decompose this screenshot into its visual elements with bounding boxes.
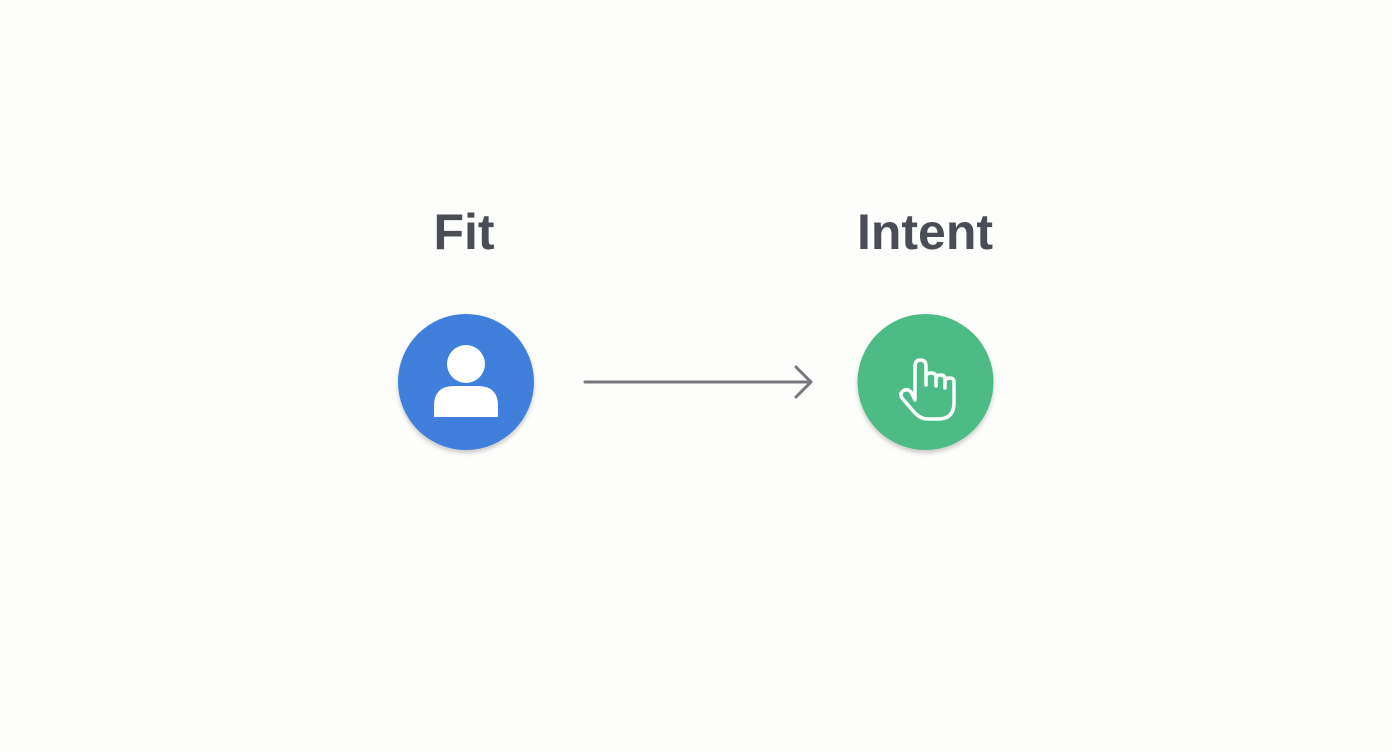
arrow bbox=[585, 367, 811, 397]
heading: Fit: Fit bbox=[433, 204, 495, 260]
icon: green hand circle bbox=[858, 314, 994, 450]
icon: blue person circle bbox=[398, 314, 534, 450]
heading: Intent: Intent bbox=[857, 204, 993, 260]
